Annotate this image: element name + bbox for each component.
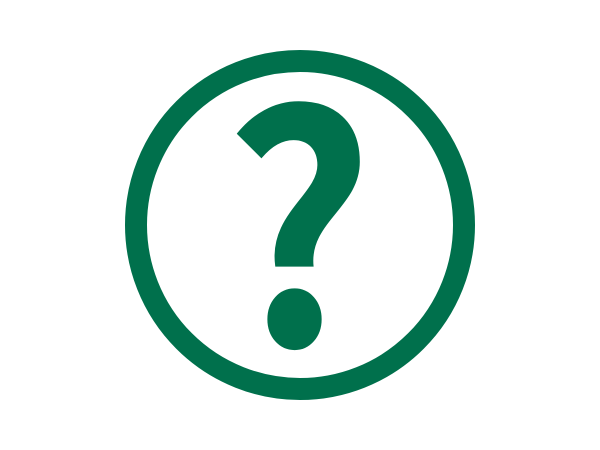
icon: circle ring (136, 61, 464, 389)
